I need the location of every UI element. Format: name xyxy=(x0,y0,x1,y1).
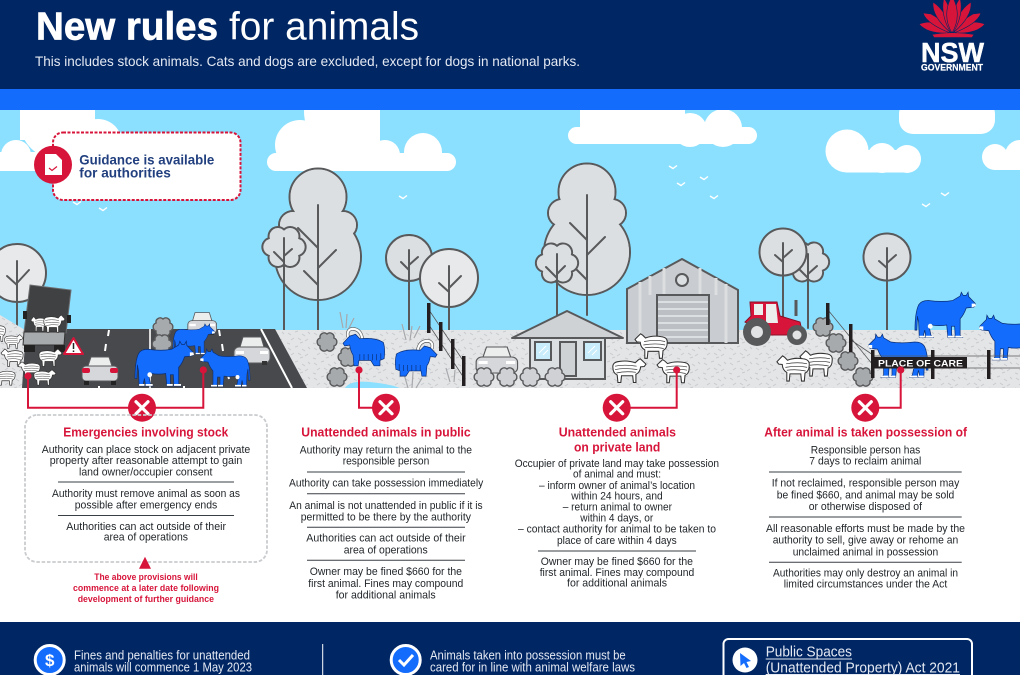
text block: rules: – return animal to owner xyxy=(563,502,672,514)
connector: private land xyxy=(603,366,680,422)
text block: rules: within 24 hours, and xyxy=(570,491,663,503)
title: New rules xyxy=(36,6,218,48)
text block: rules: be fined $660, and animal may be sold xyxy=(777,489,954,501)
text block: rules: Responsible person has xyxy=(811,444,921,456)
note: commencement: development of further guidance xyxy=(78,594,214,604)
text block: rules: possible after emergency ends xyxy=(75,500,218,512)
text block: rules: first animal. Fines may compound xyxy=(308,578,463,590)
NSW Government logo: GOVERNMENT xyxy=(921,63,983,73)
text block: rules: responsible person xyxy=(343,456,429,468)
sky xyxy=(0,100,1020,335)
tree: small clover left xyxy=(262,227,306,330)
cars on road xyxy=(82,313,270,385)
bushes xyxy=(152,318,873,386)
text block: rules: Owner may be fined $660 for the xyxy=(310,566,462,578)
note: commencement: The above provisions will xyxy=(94,572,198,582)
text block: rules: limited circumstances under the Act xyxy=(784,578,947,590)
text block: rules: – contact authority for animal to be taken to xyxy=(518,524,716,536)
warning triangle xyxy=(64,338,83,354)
text: fines commencement: animals will commence 1 May 2023 xyxy=(74,661,252,675)
heading: Emergencies involving stock xyxy=(63,425,229,440)
tree: small clover centre xyxy=(536,243,578,316)
text block: rules: Authorities can act outside of their xyxy=(306,533,466,545)
tractor xyxy=(743,300,807,346)
tree: round pair xyxy=(386,235,478,337)
ground xyxy=(0,315,1020,388)
header band xyxy=(0,0,1020,89)
house xyxy=(512,311,623,379)
text block: rules: property after reasonable attempt to gain xyxy=(50,455,242,467)
text block: rules: If not reclaimed, responsible person may xyxy=(772,478,960,490)
text block: rules: Occupier of private land may take possession xyxy=(515,458,719,470)
text block: rules: authority to sell, give away or rehome an xyxy=(773,535,958,547)
icon: document with tick xyxy=(34,146,72,184)
panel: unattended animals on private land xyxy=(515,425,719,590)
icon: cursor xyxy=(732,648,758,672)
text block: rules: land owner/occupier consent xyxy=(79,466,212,478)
text block: rules: or otherwise disposed of xyxy=(809,501,923,513)
heading xyxy=(559,425,676,454)
text block: rules: Authorities can act outside of their xyxy=(66,521,226,533)
tree: large left xyxy=(275,168,361,333)
connector: after possession xyxy=(851,366,904,422)
barn xyxy=(627,259,738,343)
footer band xyxy=(0,622,1020,675)
text block: rules xyxy=(515,458,719,590)
note: commencement: commence at a later date following xyxy=(73,583,219,593)
scene illustration xyxy=(0,74,1020,388)
callout: guidance for authorities: for authorities xyxy=(79,166,171,181)
heading: Unattended animals in public xyxy=(301,425,471,440)
text block: rules: first animal. Fines may compound xyxy=(540,567,694,579)
place of care sign: PLACE OF CARE xyxy=(878,358,963,368)
icon: dollar xyxy=(35,646,64,674)
text block: rules: of animal and must: xyxy=(573,469,661,481)
blue cows at place of care xyxy=(868,292,1020,377)
trees xyxy=(0,164,910,337)
truck xyxy=(23,285,71,352)
tree: large centre xyxy=(544,164,630,315)
panel: unattended animals in public xyxy=(289,425,484,601)
link button: act xyxy=(724,639,972,675)
note: commencement xyxy=(73,572,219,604)
blue goats xyxy=(343,329,437,376)
text block: rules xyxy=(289,444,484,601)
text block: rules: Authority can place stock on adjacent private xyxy=(42,444,250,456)
clouds xyxy=(0,74,1020,173)
tree: right clover and rounds xyxy=(760,228,910,335)
birds xyxy=(73,166,949,210)
text: fines commencement: Fines and penalties for unattended xyxy=(74,648,250,662)
text block: rules xyxy=(42,444,250,544)
link button: act: Public Spaces xyxy=(766,644,852,661)
text block: rules: for additional animals xyxy=(336,589,436,601)
text block: rules: An animal is not unattended in public if it is xyxy=(289,500,483,512)
panel: emergencies involving stock xyxy=(25,415,267,604)
car in driveway xyxy=(476,347,518,375)
text block: rules: Authority must remove animal as soon as xyxy=(52,488,240,500)
place of care sign xyxy=(873,357,967,368)
callout: guidance for authorities xyxy=(34,132,240,200)
text block: rules: permitted to be there by the authority xyxy=(301,511,471,523)
panel: after animal is taken possession of xyxy=(764,425,968,590)
text block: rules xyxy=(766,444,965,590)
heading: Unattended animals xyxy=(559,425,676,440)
blue cows on road xyxy=(135,324,250,386)
text block: rules: Owner may be fined $660 for the xyxy=(541,556,693,568)
sheep in paddock xyxy=(613,334,832,383)
text block: rules: within 4 days, or xyxy=(579,512,654,524)
NSW Government logo xyxy=(919,0,985,73)
text block: rules: All reasonable efforts must be made by the xyxy=(766,523,965,535)
subtitle: This includes stock animals. Cats and dogs are excluded, except for dogs in national parks. xyxy=(35,54,580,69)
road xyxy=(22,329,307,388)
text block: rules: 7 days to reclaim animal xyxy=(809,456,921,468)
icon: dollar: $ xyxy=(45,651,55,670)
house bushes xyxy=(474,368,565,386)
text: animal welfare: Animals taken into possession must be xyxy=(430,648,626,662)
text block: rules: place of care within 4 days xyxy=(557,535,677,547)
text block: rules: Authority may return the animal to the xyxy=(300,444,472,456)
flock of sheep xyxy=(0,324,62,385)
text block: rules: Authorities may only destroy an animal in xyxy=(773,568,958,580)
text block: rules: for additional animals xyxy=(567,578,667,590)
NSW Government logo: NSW xyxy=(921,37,985,68)
text: animal welfare xyxy=(430,648,635,675)
fence at place of care xyxy=(826,303,1020,379)
heading: on private land xyxy=(574,439,660,454)
connector: unattended in public xyxy=(355,366,400,422)
title: for animals xyxy=(229,6,419,48)
blue band xyxy=(0,89,1020,110)
text block: rules: Authority can take possession immediately xyxy=(289,478,484,490)
text: fines commencement xyxy=(74,648,252,675)
heading: After animal is taken possession of xyxy=(764,425,968,440)
text block: rules: area of operations xyxy=(104,532,188,544)
text block: rules: area of operations xyxy=(344,544,428,556)
connector: emergencies xyxy=(24,366,207,422)
callout: guidance for authorities: Guidance is available xyxy=(79,152,215,167)
icon: tick xyxy=(391,646,420,674)
text block: rules: unclaimed animal in possession xyxy=(793,546,938,558)
grass tufts xyxy=(340,312,455,388)
fence left xyxy=(427,303,466,386)
puddle xyxy=(345,382,400,388)
text block: rules: – inform owner of animal’s location xyxy=(539,480,695,492)
marker: triangle xyxy=(139,557,151,569)
text: animal welfare: cared for in line with animal welfare laws xyxy=(430,661,635,675)
